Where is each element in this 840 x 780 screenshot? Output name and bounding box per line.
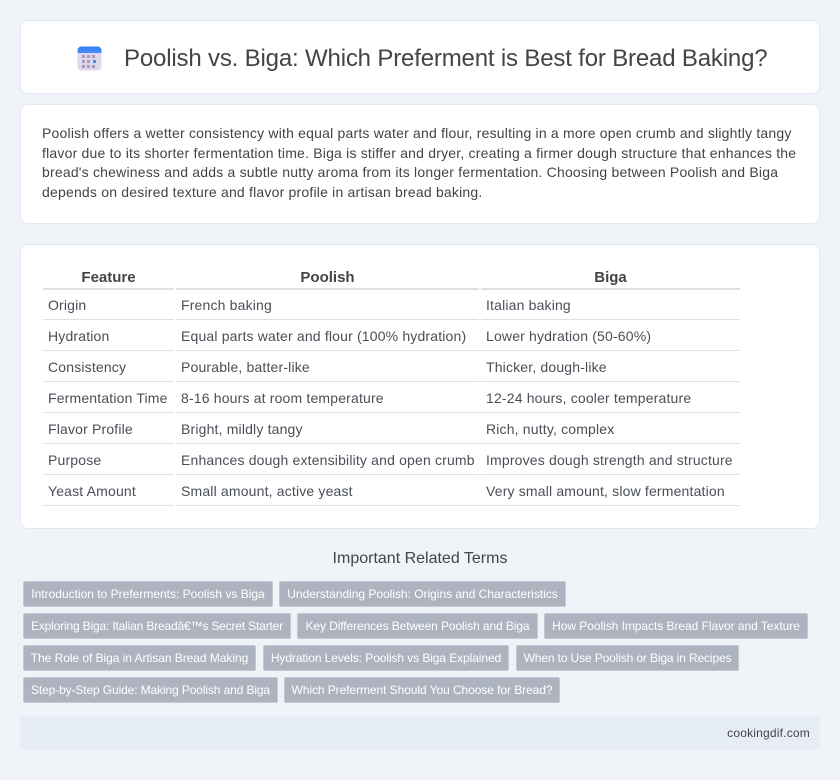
footer source text: cookingdif.com [727, 726, 810, 740]
summary paragraph: bread's chewiness and adds a subtle nutty aroma from its longer fermentation. Choosing between Poolish and Biga [42, 164, 778, 180]
heading: related terms: Important Related Terms [333, 550, 507, 567]
tag [23, 677, 278, 703]
panel: summary text [20, 104, 820, 224]
row: Yeast Amount: Small amount, active yeast [181, 483, 353, 499]
tag: Exploring Biga: Italian Breadâ€™s Secret Starter [31, 619, 283, 633]
table header: Poolish [300, 269, 355, 286]
tag [544, 613, 808, 639]
table header: Feature [81, 269, 136, 286]
row: Hydration: Equal parts water and flour (100% hydration) [181, 328, 466, 344]
row: Purpose: Purpose [48, 452, 101, 468]
row: Yeast Amount [43, 483, 740, 506]
row: Consistency: Consistency [48, 359, 126, 375]
footer [20, 716, 820, 750]
table header [43, 269, 740, 290]
tag: When to Use Poolish or Biga in Recipes [524, 651, 731, 665]
tag [23, 581, 273, 607]
row: Purpose: Enhances dough extensibility and open crumb [181, 452, 475, 468]
tag: The Role of Biga in Artisan Bread Making [31, 651, 248, 665]
tag: Introduction to Preferments: Poolish vs Biga [31, 587, 265, 601]
row: Hydration: Hydration [48, 328, 109, 344]
row: Yeast Amount: Yeast Amount [48, 483, 136, 499]
row: Consistency: Thicker, dough-like [486, 359, 607, 375]
row: Consistency [43, 359, 740, 382]
tag: How Poolish Impacts Bread Flavor and Texture [552, 619, 800, 633]
tag: Step-by-Step Guide: Making Poolish and Biga [31, 683, 270, 697]
row: Flavor Profile: Rich, nutty, complex [486, 421, 614, 437]
row: Fermentation Time: 12-24 hours, cooler temperature [486, 390, 691, 406]
tag [516, 645, 739, 671]
panel: title header [20, 20, 820, 94]
tag [297, 613, 538, 639]
panel: comparison table [20, 244, 820, 529]
row: Yeast Amount: Very small amount, slow fermentation [486, 483, 725, 499]
row: Flavor Profile: Flavor Profile [48, 421, 133, 437]
row: Fermentation Time: Fermentation Time [48, 390, 168, 406]
summary paragraph [42, 125, 796, 200]
row: Origin: Italian baking [486, 297, 571, 313]
tag: Hydration Levels: Poolish vs Biga Explained [271, 651, 501, 665]
row: Purpose: Improves dough strength and structure [486, 452, 733, 468]
row: Hydration [43, 328, 740, 351]
related term tags [23, 581, 808, 703]
tag: Which Preferment Should You Choose for Bread? [291, 683, 552, 697]
row: Purpose [43, 452, 740, 475]
row: Flavor Profile [43, 421, 740, 444]
tag: Understanding Poolish: Origins and Characteristics [287, 587, 558, 601]
row: Fermentation Time [43, 390, 740, 413]
icon: calendar [78, 46, 102, 70]
row: Flavor Profile: Bright, mildly tangy [181, 421, 303, 437]
tag [284, 677, 560, 703]
summary paragraph: flavor due to its shorter fermentation time. Biga is stiffer and dryer, creating a firmer dough structure that enhances the [42, 144, 796, 160]
table header: Biga [594, 269, 627, 286]
row: Origin [43, 297, 740, 320]
title: Poolish vs. Biga: Which Preferment is Best for Bread Baking? [124, 45, 767, 72]
tag: Key Differences Between Poolish and Biga [306, 619, 529, 633]
row: Consistency: Pourable, batter-like [181, 359, 310, 375]
row: Origin: Origin [48, 297, 86, 313]
summary paragraph: depends on desired texture and flavor profile in artisan bread baking. [42, 184, 482, 200]
row: Hydration: Lower hydration (50-60%) [486, 328, 651, 344]
summary paragraph: Poolish offers a wetter consistency with equal parts water and flour, resulting in a more open crumb and slightly tangy [42, 125, 792, 141]
tag [263, 645, 509, 671]
tag [23, 613, 291, 639]
row: Fermentation Time: 8-16 hours at room temperature [181, 390, 384, 406]
row: Origin: French baking [181, 297, 272, 313]
tag [279, 581, 566, 607]
tag [23, 645, 256, 671]
